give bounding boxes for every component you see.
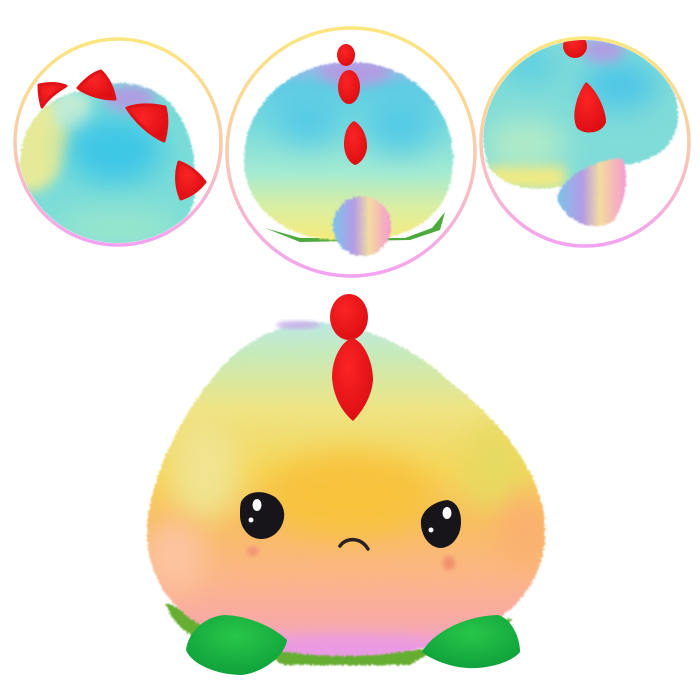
plush back, right view	[483, 40, 680, 190]
frown mouth	[340, 540, 368, 549]
plush back, middle view	[242, 60, 456, 242]
red spikes, middle view	[337, 44, 367, 165]
inset circle: left, top-side view	[1, 39, 221, 260]
red crest	[330, 294, 373, 421]
green base behind body	[166, 603, 512, 665]
inset circle: middle, back view	[227, 28, 475, 276]
tail, right view	[557, 158, 626, 226]
left eye	[240, 492, 284, 539]
purple back tuft	[276, 321, 320, 329]
plush back, left view	[19, 81, 196, 243]
tail, middle view	[333, 196, 391, 256]
right foot	[422, 615, 520, 668]
body	[146, 321, 546, 658]
red spikes, right view	[563, 34, 606, 133]
left foot	[186, 615, 287, 675]
right eye	[421, 500, 461, 548]
blush right	[443, 556, 455, 570]
green feet behind, middle view	[265, 212, 445, 242]
red spikes, left view	[39, 71, 205, 199]
blush left	[247, 546, 259, 556]
inset circle: right, tail view	[478, 30, 689, 246]
main plush: front view	[130, 294, 560, 675]
